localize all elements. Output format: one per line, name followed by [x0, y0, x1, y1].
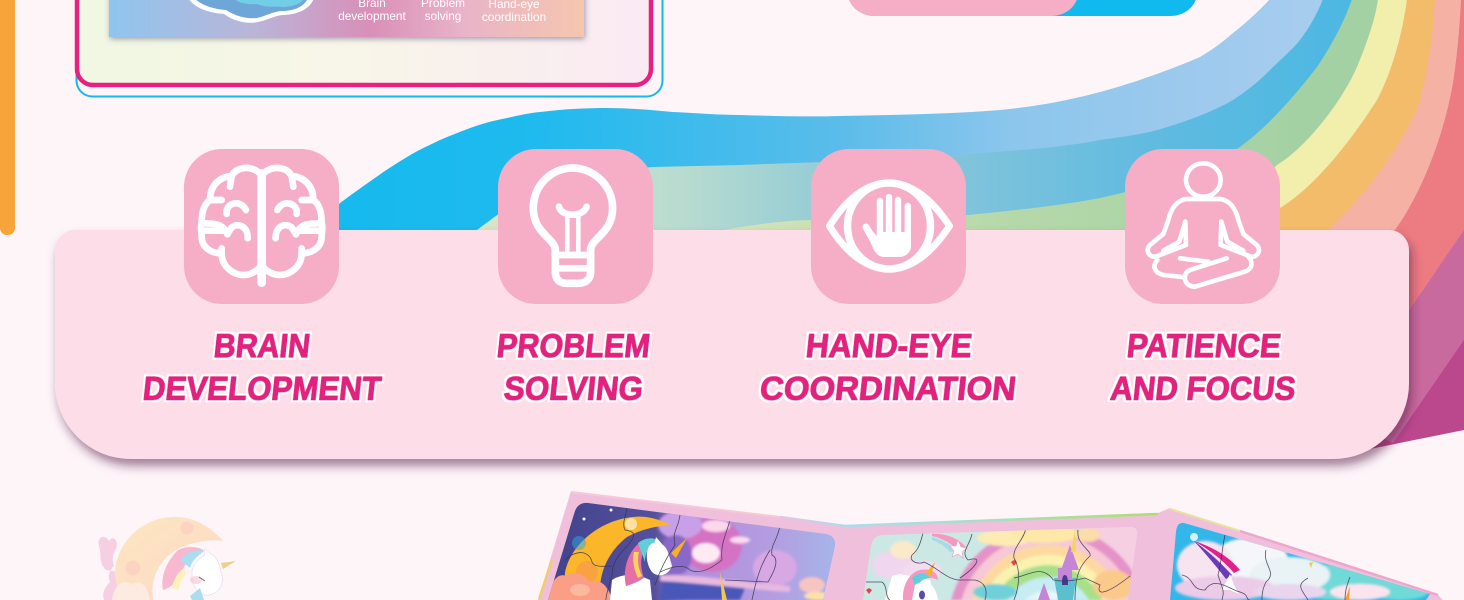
- label: hand-eye coordination: [758, 328, 1018, 408]
- panel: product card (top left): [76, 0, 662, 96]
- card captions: [338, 0, 546, 24]
- unicorn on moon decoration: [98, 517, 236, 600]
- puzzle panel: clouds and shooting star: [1165, 520, 1435, 600]
- label: brain development: DEVELOPMENT: [141, 371, 383, 408]
- icon: brain cloud: [188, 0, 314, 23]
- label: problem solving: PROBLEM: [495, 328, 652, 365]
- label: hand-eye coordination: HAND-EYE: [804, 328, 974, 365]
- card image strip: [109, 0, 584, 37]
- icon: brain: [184, 149, 339, 304]
- benefit: patience and focus: [1109, 149, 1297, 408]
- panel: benefits band: [55, 230, 1409, 459]
- puzzle panel: moon unicorn: [545, 495, 840, 600]
- label: problem solving: SOLVING: [502, 371, 645, 408]
- label: patience and focus: [1109, 328, 1297, 408]
- label: brain development: [141, 328, 383, 408]
- card captions: coordination: [482, 10, 546, 24]
- folding jigsaw puzzle book: [538, 491, 1443, 600]
- label: brain development: BRAIN: [212, 328, 312, 365]
- folder cover: [538, 491, 1443, 600]
- icon: light bulb: [498, 149, 653, 304]
- benefit: brain development: [141, 149, 383, 408]
- top pill buttons: [848, 0, 1197, 16]
- benefit: problem solving: [495, 149, 653, 408]
- label: patience and focus: PATIENCE: [1125, 328, 1283, 365]
- rainbow swoosh: [0, 0, 1464, 453]
- label: problem solving: [495, 328, 652, 408]
- label: hand-eye coordination: COORDINATION: [758, 371, 1018, 408]
- card captions: solving: [425, 9, 461, 23]
- orange side bar: [0, 0, 15, 235]
- puzzle panel: rainbow castle: [860, 525, 1145, 600]
- icon: eye with hand: [811, 149, 966, 304]
- label: patience and focus: AND FOCUS: [1109, 371, 1297, 408]
- icon: meditating person: [1125, 149, 1280, 304]
- benefit: hand-eye coordination: [758, 149, 1018, 408]
- card captions: development: [338, 9, 406, 23]
